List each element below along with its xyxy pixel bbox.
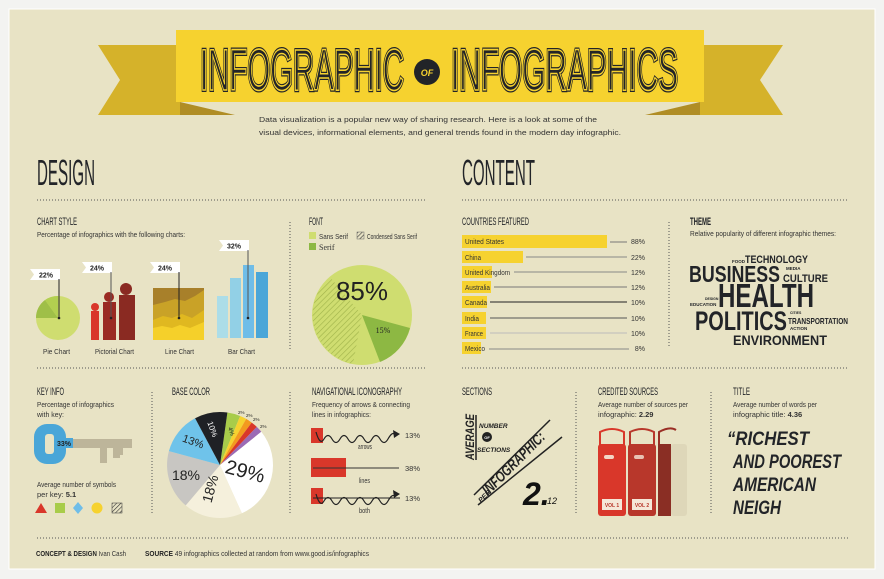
panel: sections: PER: [477, 489, 493, 504]
panel: title: NEIGH: [733, 498, 782, 519]
text: visual devices, informational elements, and general trends found in the modern day infographic.: [259, 128, 621, 137]
panel: countries featured: France: [465, 331, 483, 338]
panel: font: Condensed Sans Serif: [367, 232, 418, 241]
text: CONTENT: [462, 152, 535, 193]
panel: chart style: Pictorial Chart: [95, 347, 135, 356]
panel: countries featured: China: [465, 255, 481, 262]
panel: navigational iconography: [311, 386, 420, 515]
panel: credited sources: [598, 386, 688, 516]
panel: key info: KEY INFO: [37, 386, 64, 398]
icon: books: VOL 2: [635, 503, 649, 509]
panel: navigational iconography: lines in infographics:: [312, 410, 371, 419]
panel: chart style: [30, 216, 268, 356]
panel: navigational iconography: arrows: [358, 442, 372, 451]
panel: credited sources: CREDITED SOURCES: [598, 386, 658, 398]
panel: sections: SECTIONS: [462, 386, 492, 398]
panel: countries featured: Mexico: [465, 346, 485, 353]
panel: countries featured: Australia: [465, 285, 490, 292]
panel: theme word cloud: Relative popularity of different infographic themes:: [690, 229, 836, 238]
panel: key info: per key: 5.1: [37, 490, 76, 499]
icon: books: VOL 1: [605, 503, 619, 509]
panel: base color: 18%: [172, 467, 200, 483]
panel: base color: 10%: [205, 420, 219, 438]
panel: font: 15%: [376, 326, 391, 335]
icon: books: [598, 428, 687, 516]
panel: font: [309, 216, 418, 365]
panel: theme word cloud: POLITICS: [695, 306, 787, 336]
panel: theme word cloud: HEALTH: [718, 277, 814, 314]
panel: navigational iconography: NAVIGATIONAL ICONOGRAPHY: [312, 386, 402, 398]
panel: title: [727, 386, 842, 519]
title banner: INFOGRAPHICS: [451, 38, 678, 103]
panel: base color: 4%: [226, 427, 235, 437]
credits footer: [36, 551, 369, 558]
pie chart icon: [36, 296, 80, 340]
panel: title: AND POOREST: [732, 452, 842, 473]
panel: navigational iconography: 13%: [405, 431, 420, 440]
panel: sections: AVERAGE: [463, 413, 477, 461]
panel: sections: SECTIONS: [477, 447, 511, 454]
panel: countries featured: [462, 216, 645, 354]
panel: navigational iconography: 13%: [405, 494, 420, 503]
panel: navigational iconography: Frequency of arrows & connecting: [312, 400, 410, 409]
panel: base color: 13%: [181, 433, 206, 452]
panel: base color: 29%: [223, 456, 267, 488]
panel: sections: [462, 386, 562, 512]
panel: countries featured: 22%: [631, 255, 645, 262]
panel: title: infographic title: 4.36: [733, 410, 802, 419]
panel: title: “RICHEST: [727, 429, 810, 450]
panel: sections: 2.: [522, 476, 550, 512]
icon: key: 33%: [57, 441, 72, 448]
panel: title: TITLE: [733, 386, 750, 398]
panel: theme word cloud: MEDIA: [786, 266, 801, 271]
intro text: Data visualization is a popular new way of sharing research. Here is a look at some of the: [259, 115, 597, 124]
panel: sections: 12: [547, 496, 557, 506]
panel: countries featured: Canada: [465, 300, 487, 307]
panel: sections: NUMBER: [479, 423, 508, 430]
panel: countries featured: 88%: [631, 239, 645, 246]
panel: chart style: Line Chart: [165, 347, 195, 356]
panel: theme word cloud: CULTURE: [783, 273, 828, 285]
title banner: INFOGRAPHIC: [200, 38, 404, 103]
panel: base color: 2%: [253, 417, 260, 422]
panel: countries featured: COUNTRIES FEATURED: [462, 216, 529, 228]
panel: chart style: Percentage of infographics with the following charts:: [37, 230, 185, 239]
title banner: [98, 30, 783, 115]
panel: countries featured: India: [465, 316, 479, 323]
panel: chart style: Pie Chart: [43, 347, 71, 356]
panel: title: AMERICAN: [732, 475, 817, 496]
panel: theme word cloud: [689, 216, 848, 348]
credits footer: CONCEPT & DESIGN Ivan Cash: [36, 551, 126, 558]
flags: 24%: [90, 266, 105, 272]
panel: base color: BASE COLOR: [172, 386, 210, 398]
panel: theme word cloud: THEME: [690, 216, 711, 228]
panel: font: Serif: [319, 243, 335, 252]
panel: sections: OF: [484, 435, 490, 440]
icons: symbols: [35, 502, 122, 514]
line chart icon: [153, 288, 204, 340]
panel: base color: [167, 386, 273, 518]
panel: countries featured: 12%: [631, 285, 645, 292]
panel: key info: with key:: [36, 410, 64, 419]
flags: 32%: [227, 244, 242, 250]
text: DESIGN: [37, 152, 95, 193]
panel: base color: 2%: [246, 413, 253, 418]
panel: countries featured: 10%: [631, 316, 645, 323]
panel: theme word cloud: EDUCATION: [690, 302, 716, 307]
panel: font: FONT: [309, 216, 323, 228]
panel: base color: 2%: [238, 410, 245, 415]
panel: countries featured: 12%: [631, 270, 645, 277]
credits footer: SOURCE 49 infographics collected at random from www.good.is/infographics: [145, 551, 369, 558]
title banner: INFOGRAPHICS: [451, 38, 678, 103]
panel: navigational iconography: lines: [359, 476, 370, 485]
panel: credited sources: Average number of sources per: [598, 400, 688, 409]
panel: navigational iconography: both: [359, 506, 370, 515]
panel: theme word cloud: TECHNOLOGY: [745, 254, 809, 266]
base color pie: [167, 412, 273, 518]
flags: [30, 240, 249, 319]
flags: 24%: [158, 266, 173, 272]
flags: 22%: [39, 272, 54, 280]
panel: title: Average number of words per: [733, 400, 817, 409]
title banner: INFOGRAPHIC: [200, 38, 404, 103]
panel: credited sources: infographic: 2.29: [598, 410, 653, 419]
pictorial chart icon: [91, 283, 135, 340]
panel: theme word cloud: ACTION: [790, 326, 807, 331]
title banner: OF: [421, 68, 434, 78]
panel: key info: [34, 386, 132, 514]
font pie: [312, 265, 412, 365]
panel: chart style: CHART STYLE: [37, 216, 77, 228]
panel: theme word cloud: FOOD: [732, 259, 746, 264]
panel: sections: INFOGRAPHIC:: [479, 429, 549, 499]
panel: countries featured: United States: [465, 239, 504, 246]
panel: base color: 2%: [260, 424, 267, 429]
panel: theme word cloud: TRANSPORTATION: [788, 316, 848, 326]
panel: countries featured: 10%: [631, 300, 645, 307]
panel: countries featured: United Kingdom: [465, 270, 510, 277]
panel: navigational iconography: 38%: [405, 464, 420, 473]
panel: font: 85%: [336, 276, 388, 306]
panel: countries featured: 8%: [635, 346, 645, 353]
panel: key info: Average number of symbols: [37, 480, 116, 489]
panel: chart style: Bar Chart: [228, 347, 256, 356]
panel: base color: 18%: [199, 473, 222, 504]
panel: countries featured: 10%: [631, 331, 645, 338]
panel: theme word cloud: CITIES: [790, 311, 802, 315]
panel: key info: Percentage of infographics: [37, 400, 114, 409]
bar chart icon: [217, 265, 268, 338]
panel: theme word cloud: BUSINESS: [689, 261, 780, 287]
panel: theme word cloud: DESIGN: [705, 297, 719, 301]
panel: theme word cloud: ENVIRONMENT: [733, 332, 827, 348]
panel: font: Sans Serif: [319, 232, 349, 241]
